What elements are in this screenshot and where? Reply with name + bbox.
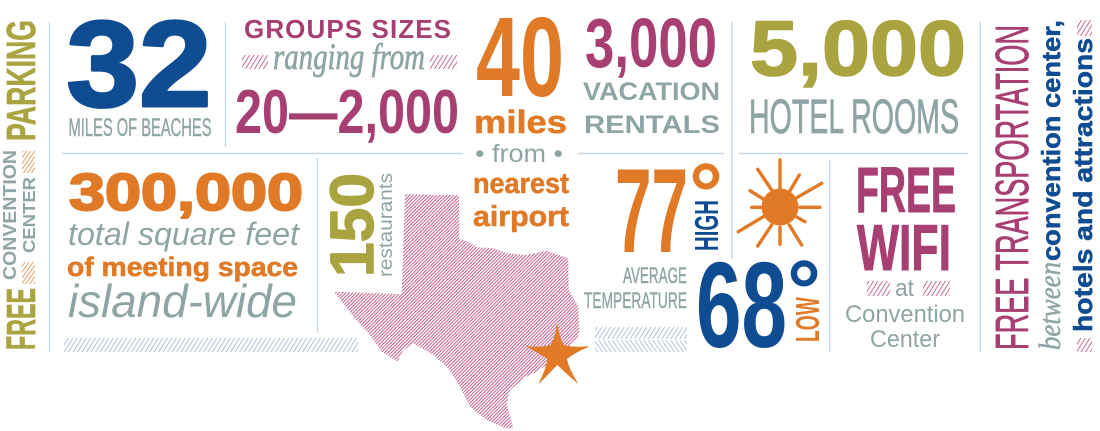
hatch: top (1077, 20, 1092, 36)
icon: starfish (527, 324, 588, 383)
text: nearest: nearest (473, 168, 569, 200)
map: texas (334, 194, 579, 428)
text: island-wide: island-wide (68, 275, 297, 327)
number: 32: 32 (66, 0, 212, 132)
hatch: left of ranging (242, 55, 268, 69)
icon: sun (738, 160, 822, 246)
number: 300,000: 300,000 (69, 164, 303, 222)
degree mark: high: ° (689, 147, 723, 242)
heading: free: FREE (856, 154, 956, 226)
panel: meeting space (64, 164, 358, 352)
hatch: bottom (1077, 338, 1092, 352)
panel: group sizes (235, 14, 459, 147)
degree mark: low: ° (787, 244, 821, 339)
label: miles of beaches: MILES OF BEACHES (68, 115, 212, 142)
number: 150: 150 (318, 173, 386, 277)
panel: free wifi (845, 154, 965, 353)
label: high: HIGH (688, 200, 725, 251)
label: temperature: TEMPERATURE (584, 288, 687, 313)
hatch: left of at (867, 281, 890, 296)
hatch: orange upper (22, 151, 35, 173)
label: hotel rooms: HOTEL ROOMS (749, 91, 959, 144)
heading: wifi: WIFI (857, 211, 951, 284)
panel: miles of beaches (66, 0, 212, 142)
number: 5,000: 5,000 (750, 4, 966, 92)
panel: hotel rooms (749, 4, 966, 144)
number: 77: 77 (615, 144, 688, 278)
panel: free convention center parking (0, 20, 44, 350)
panel: restaurants (318, 173, 397, 277)
panel: free transportation (986, 20, 1098, 352)
text: miles: miles (474, 104, 567, 140)
label: rentals: RENTALS (584, 111, 720, 139)
hatch: right of at (923, 281, 950, 296)
heading: groups sizes: GROUPS SIZES (244, 14, 451, 44)
hatch: blue band (64, 338, 358, 352)
text: hotels and attractions: hotels and attractions (1068, 38, 1098, 332)
text: airport: airport (473, 201, 569, 233)
hatch: orange lower (22, 262, 35, 284)
label: center: CENTER (19, 177, 39, 253)
text: at: at (895, 275, 914, 302)
hatch: right of ranging (430, 55, 457, 69)
script: ranging from: ranging from (273, 37, 425, 78)
panel: average temperature (584, 144, 826, 373)
number: 3,000: 3,000 (585, 4, 717, 82)
label: restaurants: restaurants (375, 173, 397, 277)
text: convention center: convention center, (1036, 20, 1066, 261)
text: total square feet: total square feet (68, 216, 300, 252)
text: center: Center (870, 326, 940, 353)
label: low: LOW (789, 297, 826, 342)
label: average: AVERAGE (623, 263, 687, 288)
text: from: • from • (475, 140, 563, 168)
text: convention: Convention (845, 301, 965, 328)
panel: 40 miles from nearest airport (473, 0, 569, 233)
number: 68: 68 (696, 237, 787, 373)
label: vacation: VACATION (583, 78, 720, 106)
script: between: between (1032, 262, 1067, 350)
panel: vacation rentals (583, 4, 720, 139)
hatch: chevron band (595, 327, 687, 352)
number: 20-2,000: 20—2,000 (235, 77, 459, 147)
text: of meeting space: of meeting space (67, 252, 298, 282)
